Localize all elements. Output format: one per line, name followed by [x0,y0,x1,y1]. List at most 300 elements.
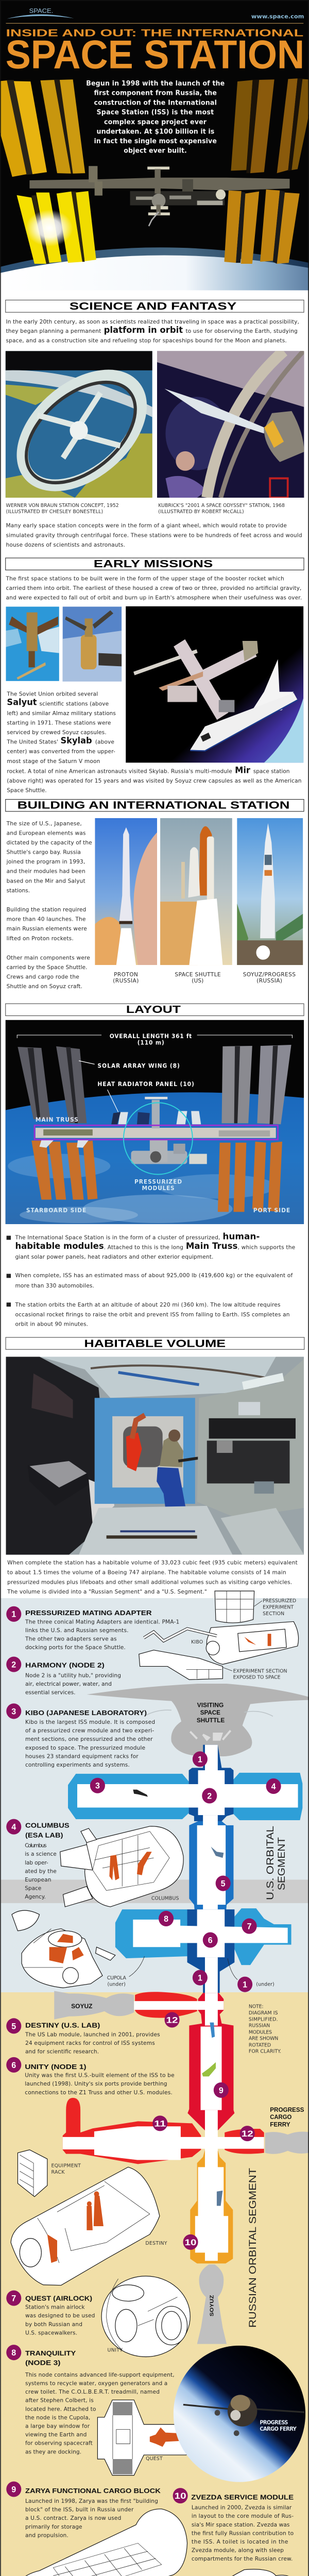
label: Progress cargo ferry: CARGO [270,2113,291,2121]
Salyut Skylab Mir paragraph [6,691,301,794]
label: pressurized modules: PRESSURIZED [134,1179,182,1185]
photo: Progress cargo ferry [174,2346,305,2482]
badges on Russian diagram: 6 [208,1936,213,1945]
heading: building an international station: BUILDING AN INTERNATIONAL STATION [18,800,289,811]
label: Progress cargo ferry [270,2106,304,2128]
heading: layout: LAYOUT [126,1004,181,1015]
heading: science and fantasy: SCIENCE AND FANTASY [70,301,237,312]
drawing: Columbus module [60,1826,183,1907]
Salyut Skylab Mir paragraph: (above right) was operated for 15 years and was visited by Soyuz crew capsules as well as the American [7,777,301,784]
bullet: orbit: orbit in about 90 minutes. [15,1321,88,1328]
intro text: construction of the International [94,99,217,107]
badges on Russian diagram: 12 [242,2129,253,2139]
title line 2: SPACE STATION [6,32,304,77]
item 4: Columbus: Agency. [25,1893,46,1900]
caption: Soyuz/Progress: (RUSSIA) [256,977,282,984]
drawing: Destiny module [11,2167,160,2285]
intro paragraph: to use for observing the Earth, studying [185,328,298,334]
logo: SPACE. [29,8,53,14]
item 1: pressurized mating adapter: The three conical Mating Adapters are identical. PMA-1 [25,1618,179,1625]
panel: U.S. orbital segment background [1,1598,308,1992]
item 8: Tranquility: for observing spacecraft [25,2440,93,2447]
item 10: Zvezda: the ISS. A toilet is located in the [192,2538,288,2545]
building paragraph: joined the program in 1993, [6,858,85,865]
item 3: Kibo: Kibo is the largest ISS module. It is composed [25,1719,155,1725]
label: heat radiator panel [97,1081,194,1112]
item 7: Quest [6,2291,95,2336]
label: mating adapter under: 1 [243,1980,247,1990]
item 7: Quest: Station's main airlock [25,2303,85,2311]
drawing: Zvezda module [100,2569,304,2576]
item 6: Unity: connections to the Z1 Truss and other U.S. modules. [25,2089,173,2096]
section: science and fantasy [3,318,304,601]
caption: Kubrick: KUBRICK'S "2001 A SPACE ODYSSEY" STATION, 1968 [158,503,285,509]
bullet: mass: more than 330 automobiles. [15,1282,94,1289]
bullet: modules and truss [7,1231,296,1260]
item 10: Zvezda: compartments for the Russian crew. [192,2555,293,2562]
intro text: complex space project ever [104,118,207,126]
bullet: mass: When complete, ISS has an estimated mass of about 925,000 lb (419,600 kg) or the equivalent of [15,1272,293,1279]
label: mating adapter under [228,1958,274,1992]
solar arrays upper right [231,78,309,173]
item 6: Unity: 6 [11,2061,16,2070]
item 3: Kibo: ment sections, one pressurized and the other [25,1736,153,1742]
item 10: Zvezda: in layout to the core module of Rus- [192,2513,294,2519]
intro paragraph [6,318,299,344]
item 1: pressurized mating adapter [6,1606,179,1651]
label: Progress cargo ferry: FERRY [270,2121,290,2128]
Russian module interiors [63,1993,264,2261]
section: early missions photos and text [6,606,304,965]
building paragraph: stations. [7,887,30,894]
building paragraph: more than 40 launches. The [7,916,86,923]
photo: Skylab [63,607,122,682]
diagram note: ROTATED [249,2042,271,2048]
module: Columbus [233,1773,302,1820]
header hero panel [0,0,309,312]
truss structure [36,1128,276,1138]
badges on Russian diagram: 12 [166,2015,178,2025]
badges on U.S. diagram: 5 [221,1879,226,1889]
habitable volume paragraph: When complete the station has a habitable volume of 33,023 cubic feet (935 cubic meters) equivalent [7,1560,298,1566]
item 1: pressurized mating adapter: The other two adapters serve as [25,1635,117,1642]
heading: layout [6,1004,304,1016]
item 1: pressurized mating adapter: PRESSURIZED MATING ADAPTER [25,1609,152,1617]
building paragraph: based on the Mir and Salyut [7,877,85,884]
heading: early missions: EARLY MISSIONS [94,558,213,570]
label: overall length [110,1033,192,1046]
bullet: modules and truss: giant solar power panels, heat radiators and other exterior equipment. [15,1253,213,1260]
building paragraph end: Shuttle and on Soyuz craft. [7,983,82,990]
astronauts small [133,1790,224,1858]
drawing: Cupola [12,1910,115,1988]
drawing: Quest airlock: QUEST [146,2456,163,2462]
solar arrays lower right [224,190,300,264]
item 6: Unity: Unity was the first U.S.-built element of the ISS to be [25,2072,175,2079]
item 9: Zarya: and propulsion. [25,2532,68,2538]
building paragraph [6,820,92,942]
diagram note: DIAGRAM IS [249,2010,278,2016]
caption: Proton [113,971,139,984]
label: main truss: MAIN TRUSS [36,1116,78,1123]
labels: Kibo: EXPOSED TO SPACE [233,1674,281,1681]
early missions paragraph: and were expected to fall out of orbit and burn up in Earth's atmosphere when their usefulness was over. [6,595,302,601]
item 7: Quest: by both Russian and [25,2321,82,2328]
item 8: Tranquility: 8 [11,2348,16,2358]
Salyut Skylab Mir paragraph: Mir [235,765,250,775]
item 2: Harmony: Node 2 is a "utility hub," providing [25,1672,121,1679]
silhouette: Soyuz lower [197,2264,227,2344]
photo: Proton rocket [95,818,157,965]
item 10: Zvezda: 10 [175,2492,186,2501]
annotated station layout photo [6,1020,304,1224]
label: pressurized modules: MODULES [142,1185,175,1192]
item 7: Quest: 7 [11,2294,16,2303]
Salyut Skylab Mir paragraph: scientific stations (above [40,700,109,707]
item 4: Columbus [6,1819,70,1900]
intro text: Space Station (ISS) is the most [96,109,214,116]
item 5: Destiny: 24 equipment racks for control of ISS systems [25,2040,155,2046]
intro text: in fact the single most expensive [94,138,217,145]
photo: Soyuz rocket [237,818,303,965]
bullet: orbit: The station orbits the Earth at an altitude of about 220 mi (360 km). The low altitude requires [14,1301,281,1308]
item 3: Kibo: exposed to space. The pressurized module [25,1744,145,1751]
Salyut Skylab Mir paragraph: starting in 1971. These stations were [7,719,111,726]
caption: Space Shuttle: (US) [192,977,203,984]
label: starboard side: STARBOARD SIDE [26,1207,86,1214]
bullet: modules and truss: habitable modules [15,1241,104,1251]
Salyut Skylab Mir paragraph: left) and similar Almaz military stations [7,710,116,717]
item 9: Zarya: primarily for storage [25,2523,82,2530]
building paragraph: Building the station required [7,906,86,913]
item 4: Columbus: lab oper- [25,1859,48,1866]
label: overall length: (110 m) [138,1039,164,1046]
intro text: Begun in 1998 with the launch of the [86,80,225,88]
item 10: Zvezda: the first fully Russian contribution to [192,2530,294,2537]
badges on U.S. diagram: 1 [198,1755,202,1764]
item 10: Zvezda: ZVEZDA SERVICE MODULE [191,2493,294,2501]
bullet: orbit [7,1301,289,1328]
silhouette: visiting space shuttle: SHUTTLE [197,1717,225,1724]
building paragraph: main Russian elements were [7,925,87,932]
building paragraph: The size of U.S., Japanese, [6,820,82,827]
photo: Progress cargo ferry: PROGRESS [260,2420,288,2426]
heading: habitable volume [6,1337,304,1350]
label: solar array wing: SOLAR ARRAY WING (8) [97,1062,180,1069]
illustration: 2001 A Space Odyssey station [157,351,304,498]
item 8: Tranquility: (NODE 3) [25,2359,60,2367]
label: U.S. orbital segment: SEGMENT [277,1837,287,1890]
caption: Proton: (RUSSIA) [113,977,139,984]
badges on U.S. diagram: 4 [271,1782,276,1791]
photo: Salyut [6,607,59,681]
item 7: Quest: QUEST (AIRLOCK) [25,2295,92,2302]
early missions paragraph: The first space stations to be built were in the form of the upper stage of the booster rocket which [5,575,284,582]
label: U.S. orbital segment [265,1826,287,1900]
badges on Russian diagram [152,1911,257,2141]
label: pressurized modules [134,1179,182,1192]
photo: Mir and shuttle [126,606,303,762]
badge 10: 10 [185,2238,197,2247]
item 3: Kibo: of a pressurized crew module and two experi- [25,1727,154,1734]
labels: Kibo: EXPERIMENT [263,1604,294,1611]
bullet: modules and truss: . Attached to this is the long [104,1244,183,1251]
badges on Russian diagram: 7 [247,1922,252,1931]
item 8: Tranquility: as they are docking. [25,2448,81,2455]
title line 1: INSIDE AND OUT: THE INTERNATIONAL [6,27,303,39]
highlight: pressurized modules circle [124,1103,193,1175]
silhouette: visiting space shuttle [87,1684,309,1756]
module interiors [77,1745,298,1917]
drawing: Kibo module [139,1591,299,1681]
photo: Progress cargo ferry: CARGO FERRY [260,2427,297,2432]
heading: building an international station [6,800,304,811]
badges on U.S. diagram: 2 [207,1791,212,1801]
section: launch captions and layout [6,954,304,1289]
building paragraph: dictated by the capacity of the [7,839,92,846]
photo: station interior [6,1357,304,1555]
item 4: Columbus: (ESA LAB) [25,1831,63,1839]
item 6: Unity [6,2057,175,2096]
item 3: Kibo [6,1703,155,1768]
item 2: Harmony: air, electrical power, water, and [25,1681,112,1687]
diagram note: ARE SHOWN [249,2036,278,2042]
label: port side: PORT SIDE [253,1207,290,1214]
bullet: modules and truss: Main Truss [186,1241,237,1251]
Salyut Skylab Mir paragraph: center) was converted from the upper- [7,748,115,755]
label: overall length: OVERALL LENGTH 361 ft [110,1033,192,1040]
item 4: Columbus: European [25,1876,51,1883]
Salyut Skylab Mir paragraph: The United States' [6,738,58,745]
item 9: Zarya [6,2481,161,2538]
solar arrays lower left [17,191,96,264]
label: Cupola: CUPOLA [107,1975,126,1981]
silhouette: Soyuz docked: SOYUZ [71,2003,92,2010]
badges on Russian diagram: 1 [198,1973,202,1983]
label: Russian orbital segment: RUSSIAN ORBITAL SEGMENT [248,2168,259,2328]
Earth horizon [0,247,309,290]
item 6: Unity: UNITY (NODE 1) [25,2063,87,2071]
building paragraph end: Crews and cargo rode the [7,973,79,980]
early missions paragraph: carried them into orbit. The earliest of these housed a crew of two or three, provided no artificial gravity, [6,585,301,591]
wheel paragraph: simulated gravity through centrifugal force. These stations were to be hundreds of feet across and would [6,532,302,538]
module: Zarya [187,1993,234,2130]
panel: Russian orbital segment background [1,1992,308,2576]
station truss and modules [29,166,289,226]
drawing: Unity node: UNITY [108,2347,123,2353]
Salyut Skylab Mir paragraph: (above [95,738,114,745]
caption: Kubrick [158,503,285,515]
intro text [86,80,225,155]
item 9: Zarya: 9 [11,2485,16,2494]
module: Poisk [135,1992,197,2018]
labels: Kibo: KIBO [191,1639,203,1645]
item 10: Zvezda: Zvezda module, along with sleep [192,2547,284,2554]
diagram note: MODULES [249,2029,272,2035]
intro paragraph: In the early 20th century, as soon as scientists realized that traveling in space was a practical possibility, [6,318,299,325]
item 4: Columbus: is a science [25,1851,57,1857]
illustration: von Braun wheel station [5,351,152,498]
module: Zvezda [190,2150,233,2263]
module: Unity [187,1909,234,1993]
label: Progress cargo ferry: PROGRESS [270,2106,304,2113]
drawing: Zarya module [15,2509,187,2576]
module: Quest [234,1908,291,1965]
label: mating adapter under: (under) [256,1981,274,1987]
item 1: pressurized mating adapter: 1 [11,1610,16,1619]
labels: Kibo: EXPERIMENT SECTION [233,1668,287,1674]
item 7: Quest: U.S. spacewalkers. [25,2329,77,2336]
item 1: pressurized mating adapter: docking ports for the Space Shuttle. [25,1644,126,1651]
labels: Kibo: PRESSURIZED [263,1598,296,1604]
item 2: Harmony: 2 [11,1660,16,1669]
caption: von Braun: (ILLUSTRATED BY CHESLEY BONESTELL) [6,509,103,515]
diagram note: RUSSIAN [249,2023,270,2029]
item 10: Zvezda: Launched in 2000, Zvezda is similar [192,2504,292,2511]
item 4: Columbus: Space [25,1885,42,1892]
diagram note: SIMPLIFIED. [249,2016,278,2022]
building paragraph end [7,954,90,990]
pressurized modules [131,1097,207,1164]
label: U.S. orbital segment: U.S. ORBITAL [265,1826,276,1900]
labels: Kibo: SECTION [263,1611,284,1617]
module: Kibo [68,1774,189,1819]
drawing: Columbus module: COLUMBUS [151,1895,179,1902]
badges on U.S. diagram [90,1751,281,1891]
item 4: Columbus: COLUMBUS [25,1821,70,1829]
item 5: Destiny: The US Lab module, launched in 2001, provides [25,2031,160,2038]
intro text: undertaken. At $100 billion it is [96,128,215,135]
building paragraph end: carried by the Space Shuttle. [7,964,88,971]
caption: von Braun [6,503,119,515]
Salyut Skylab Mir paragraph: Space Shuttle. [7,787,47,794]
item 10: Zvezda [173,2488,294,2562]
diagram note [249,2004,281,2055]
item 9: Zarya: Launched in 1998, Zarya was the first "building [25,2498,158,2504]
bullet: modules and truss: The International Space Station is in the form of a cluster of pressurized, [14,1234,220,1241]
caption: Soyuz/Progress [243,971,296,984]
item 8: Tranquility: viewing the Earth and [25,2431,87,2438]
item 2: Harmony [6,1656,121,1696]
item 9: Zarya: ZARYA FUNCTIONAL CARGO BLOCK [25,2487,161,2495]
habitable volume paragraph: The volume is divided into a "Russian Segment" and a "U.S. Segment." [7,1588,207,1595]
silhouette: Soyuz docked [54,1991,134,2020]
item 8: Tranquility: after Stephen Colbert, is [25,2397,94,2404]
bullet: mass [7,1272,293,1289]
heading: habitable volume: HABITABLE VOLUME [84,1338,226,1350]
intro text: object ever built. [124,147,187,155]
item 5: Destiny: and for scientific research. [25,2048,99,2055]
item 8: Tranquility [6,2345,175,2455]
item 5: Destiny [6,2018,160,2055]
drawing: equipment rack [18,2150,81,2197]
photo: Space Shuttle launch [160,818,232,965]
section: orbit and habitable volume [6,1301,304,1595]
item 8: Tranquility: This node contains advanced life-support equipment, [25,2371,175,2378]
badges on U.S. diagram: 3 [95,1781,100,1791]
item 9: Zarya: a U.S. contract. Zarya is now used [25,2515,121,2521]
item 8: Tranquility: TRANQUILITY [25,2349,76,2357]
module: Rassvet [225,2129,264,2154]
module: Harmony and mating adapter [189,1745,233,1821]
early missions paragraph [5,575,302,601]
building paragraph: Shuttle's cargo bay. Russia [7,849,81,856]
astronauts small [202,2023,222,2206]
building paragraph: and European elements was [7,829,86,836]
caption: Proton: PROTON [114,971,138,978]
heading: science and fantasy [6,300,304,312]
labels: Kibo [191,1598,296,1681]
badges on Russian diagram: 11 [154,2119,166,2128]
shuttle wing band [1,1879,308,1903]
caption: Space Shuttle [175,971,221,984]
Salyut Skylab Mir paragraph: most stage of the Saturn V moon [7,758,100,765]
item 9: Zarya: block" of the ISS, built in Russia under [25,2506,134,2513]
diagram note: NOTE: [249,2004,264,2010]
logo [7,8,74,19]
silhouette: visiting space shuttle: VISITING [197,1702,224,1709]
overall length bracket [17,1035,292,1038]
item 10: Zvezda: sia's Mir space station. Zvezda was [192,2521,290,2528]
item 3: Kibo: 3 [11,1707,16,1716]
highlight: main truss outline [35,1125,278,1140]
item 7: Quest: was designed to be used [25,2312,95,2319]
habitable volume paragraph: to about 1.5 times the volume of a Boeing 747 airplane. The habitable volume consists of 14 main [7,1569,286,1575]
item 4: Columbus: 4 [11,1822,16,1832]
module: Tranquility [115,1909,187,1958]
intro paragraph: space, and as a construction site and refueling stop for spaceships bound for the Moon and planets. [6,337,287,344]
silhouette: Progress [265,2131,309,2154]
label: Cupola: (under) [108,1981,126,1987]
radiators [40,1111,201,1148]
silhouette: visiting space shuttle: SPACE [200,1709,220,1716]
module: Nauka [63,2098,201,2164]
caption: von Braun: WERNER VON BRAUN STATION CONCEPT, 1952 [6,503,119,509]
Salyut Skylab Mir paragraph: space station [253,768,289,775]
heading: early missions [6,558,304,570]
website url: www.space.com [251,13,304,20]
drawing: equipment rack: RACK [51,2170,65,2175]
Salyut Skylab Mir paragraph: Salyut [7,697,37,707]
solar wings top [18,1045,291,1124]
caption: Space Shuttle: SPACE SHUTTLE [175,971,221,978]
item 8: Tranquility: crew toilet. The C.O.L.B.E.R.T. treadmill, named [25,2388,160,2395]
item 8: Tranquility: systems to recycle water, oxygen generators and a [25,2380,167,2386]
item 8: Tranquility: the node is the Cupola, [25,2414,90,2421]
Salyut Skylab Mir paragraph: Skylab [60,736,92,745]
intro paragraph: they began planning a permanent [6,328,101,334]
caption: Kubrick: (ILLUSTRATED BY ROBERT McCALL) [158,509,244,515]
solar wings bottom [31,1141,282,1212]
caption: Soyuz/Progress: SOYUZ/PROGRESS [243,971,296,978]
label: heat radiator panel: HEAT RADIATOR PANEL (10) [97,1081,194,1088]
bullet: modules and truss: , which supports the [237,1244,296,1251]
item 2: Harmony: HARMONY (NODE 2) [25,1661,105,1669]
item 8: Tranquility: a large bay window for [25,2422,90,2430]
item 5: Destiny: DESTINY (U.S. LAB) [25,2021,100,2029]
solar arrays upper left [0,79,85,177]
diagram: U.S. segment and shuttle [1,1591,309,1917]
building paragraph: lifted on Proton rockets. [7,935,74,942]
drawing: Unity node [101,2276,190,2357]
badge 10 [183,2234,198,2250]
intro text: first component from Russia, the [94,89,217,97]
module: Destiny [189,1821,233,1917]
item 6: Unity: launched (1998). Unity's six ports provide berthing [25,2080,167,2087]
bullet: orbit: occasional rocket firings to raise the orbit and prevent ISS from falling to Earth. ISS completes an [15,1311,289,1318]
item 2: Harmony: essential services. [25,1689,76,1696]
label: solar array wing [79,1061,180,1069]
